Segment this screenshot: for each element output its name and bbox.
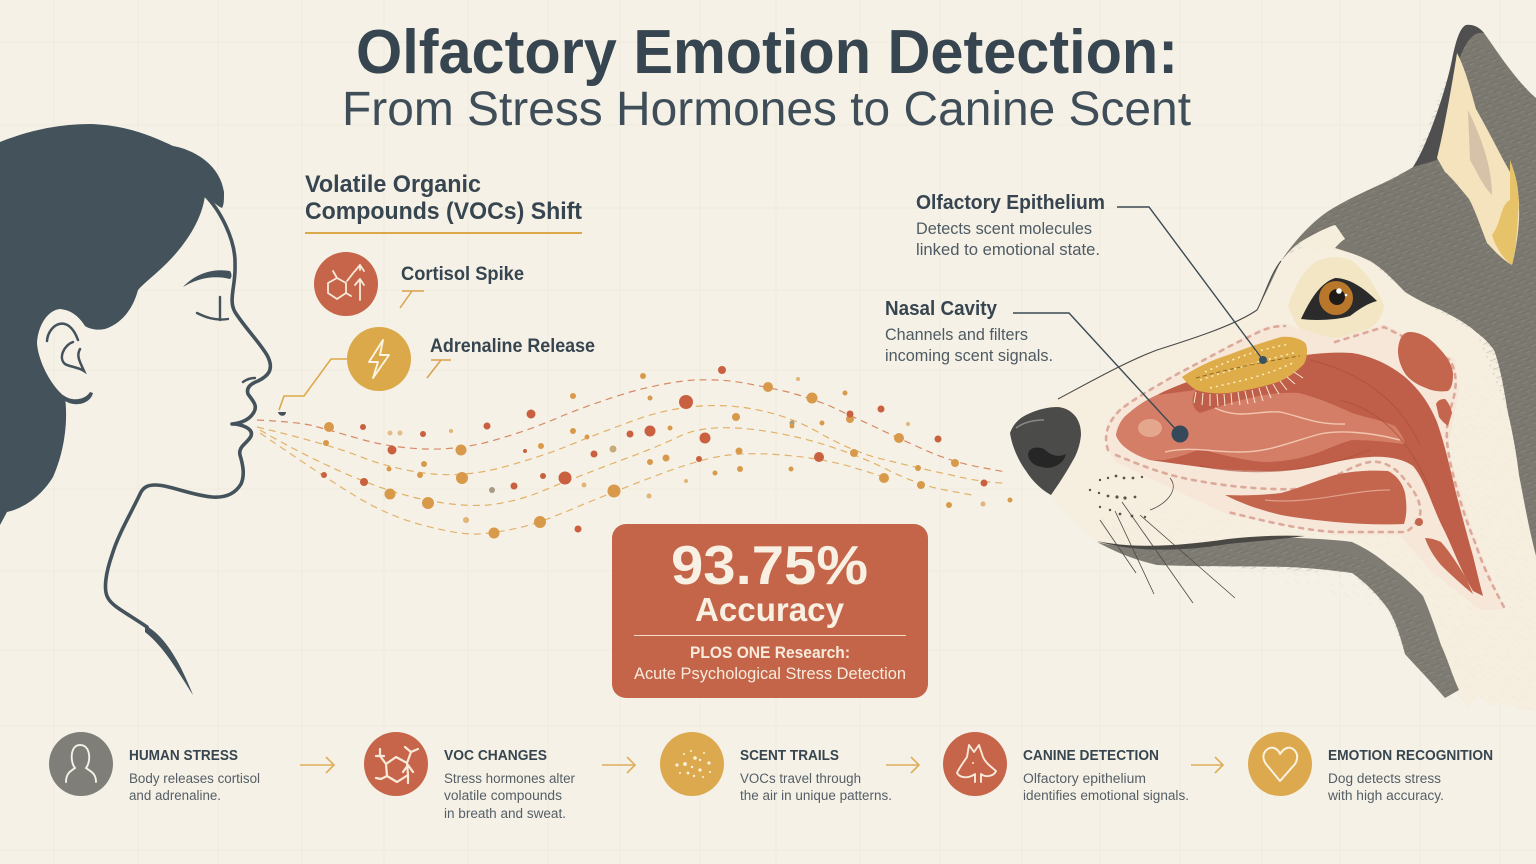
nostril (243, 378, 255, 382)
icon: person (49, 732, 113, 796)
callout: olfactory epithelium: Olfactory Epithelium (916, 192, 1105, 214)
upper right sinus (1398, 332, 1453, 391)
heading: VOC shift (305, 171, 582, 234)
lower red cavity (1225, 471, 1406, 524)
closed eye (197, 297, 228, 320)
process step: canine detection: Olfactory epithelium (1023, 771, 1146, 786)
tick mark (400, 291, 424, 308)
bone and tissue band (1106, 324, 1505, 610)
scent particles (323, 373, 1012, 538)
grey fur upper head (1257, 25, 1536, 556)
icon: molecule and arrows (314, 252, 378, 316)
cream brow highlight (1299, 225, 1345, 252)
olfactory epithelium gold (1182, 337, 1307, 406)
icon: heart (1248, 732, 1312, 796)
item: adrenaline release (278, 327, 595, 416)
scent trails (257, 366, 1012, 538)
accuracy stat card (612, 524, 928, 698)
process step: VOC changes: in breath and sweat. (444, 806, 566, 821)
callout: nasal cavity: incoming scent signals. (885, 347, 1053, 365)
tick mark (427, 360, 451, 378)
ear (47, 324, 84, 371)
process step: emotion recognition: Dog detects stress (1328, 771, 1441, 786)
process step: emotion recognition: with high accuracy. (1327, 788, 1444, 803)
process step: VOC changes: VOC CHANGES (444, 748, 547, 764)
nasal cavity main red (1116, 353, 1483, 596)
eye patch (1288, 257, 1384, 339)
whiskers (1100, 478, 1235, 603)
label: Cortisol Spike (401, 264, 524, 285)
process step: scent trails: VOCs travel through (740, 771, 861, 786)
accuracy stat card: Accuracy (695, 591, 845, 628)
mouth line (1097, 536, 1305, 550)
callout: olfactory epithelium (916, 192, 1267, 364)
arrow (886, 757, 919, 773)
leader line (1117, 207, 1263, 360)
head silhouette (1010, 25, 1536, 712)
label: Adrenaline Release (430, 336, 595, 357)
ear inner (1437, 53, 1519, 265)
icon: lightning bolt (347, 327, 411, 391)
nose (1010, 407, 1081, 495)
process step: emotion recognition (1248, 732, 1493, 803)
accuracy stat card: PLOS ONE Research: (690, 644, 850, 662)
heading: VOC shift: Volatile Organic (305, 171, 481, 198)
face outline (105, 195, 270, 627)
process step: VOC changes: volatile compounds (444, 788, 562, 803)
process step: emotion recognition: EMOTION RECOGNITION (1328, 748, 1493, 764)
arrow (1191, 757, 1223, 773)
icon: scattered dots (660, 732, 724, 796)
callout: nasal cavity (885, 298, 1188, 442)
accuracy stat card: 93.75% (671, 534, 868, 596)
hair (0, 124, 224, 525)
dashed trail lines (257, 380, 1006, 534)
arrow (602, 757, 635, 773)
neck taper (145, 625, 193, 695)
eyebrow (183, 270, 232, 287)
dog head anatomy illustration (1010, 25, 1536, 712)
arrow (300, 757, 334, 773)
process step: canine detection: CANINE DETECTION (1023, 748, 1159, 764)
callout: olfactory epithelium: linked to emotional state. (916, 241, 1100, 259)
callout: nasal cavity: Nasal Cavity (885, 298, 998, 320)
callout: nasal cavity: Channels and filters (885, 326, 1028, 344)
icon: molecule (364, 732, 428, 796)
bottom sliver sinus (1425, 538, 1473, 594)
callout: olfactory epithelium: Detects scent molecules (916, 220, 1092, 238)
process step: scent trails: SCENT TRAILS (740, 748, 839, 764)
heading: VOC shift: Compounds (VOCs) Shift (305, 198, 582, 225)
title: Olfactory Emotion Detection: (356, 18, 1178, 87)
process step: scent trails (660, 732, 892, 803)
process step: VOC changes: Stress hormones alter (444, 771, 575, 786)
process step: canine detection: identifies emotional signals. (1023, 788, 1189, 803)
process step: human stress (49, 732, 260, 803)
small sinus (1436, 399, 1452, 426)
connector from nose to icon (279, 359, 347, 410)
title: From Stress Hormones to Canine Scent (342, 83, 1191, 136)
eye (1301, 278, 1377, 320)
tissue speckle outlines (1106, 326, 1505, 609)
grey fur jaw and neck (1097, 538, 1459, 698)
leader line (1013, 313, 1180, 434)
muzzle dots (1089, 475, 1146, 518)
process step: human stress: Body releases cortisol (129, 771, 260, 786)
title (342, 18, 1191, 136)
ridge outline (1058, 261, 1281, 399)
accuracy stat card: Acute Psychological Stress Detection (634, 665, 906, 683)
process step: scent trails: the air in unique patterns. (740, 788, 892, 803)
item: cortisol spike (314, 252, 524, 316)
process step: human stress: HUMAN STRESS (129, 748, 238, 764)
process step: VOC changes (364, 732, 575, 821)
human profile illustration (0, 124, 270, 695)
icon: dog head (943, 732, 1007, 796)
turbinate lighter folds (1116, 390, 1405, 462)
process step: canine detection (943, 732, 1189, 803)
process step: human stress: and adrenaline. (129, 788, 221, 803)
